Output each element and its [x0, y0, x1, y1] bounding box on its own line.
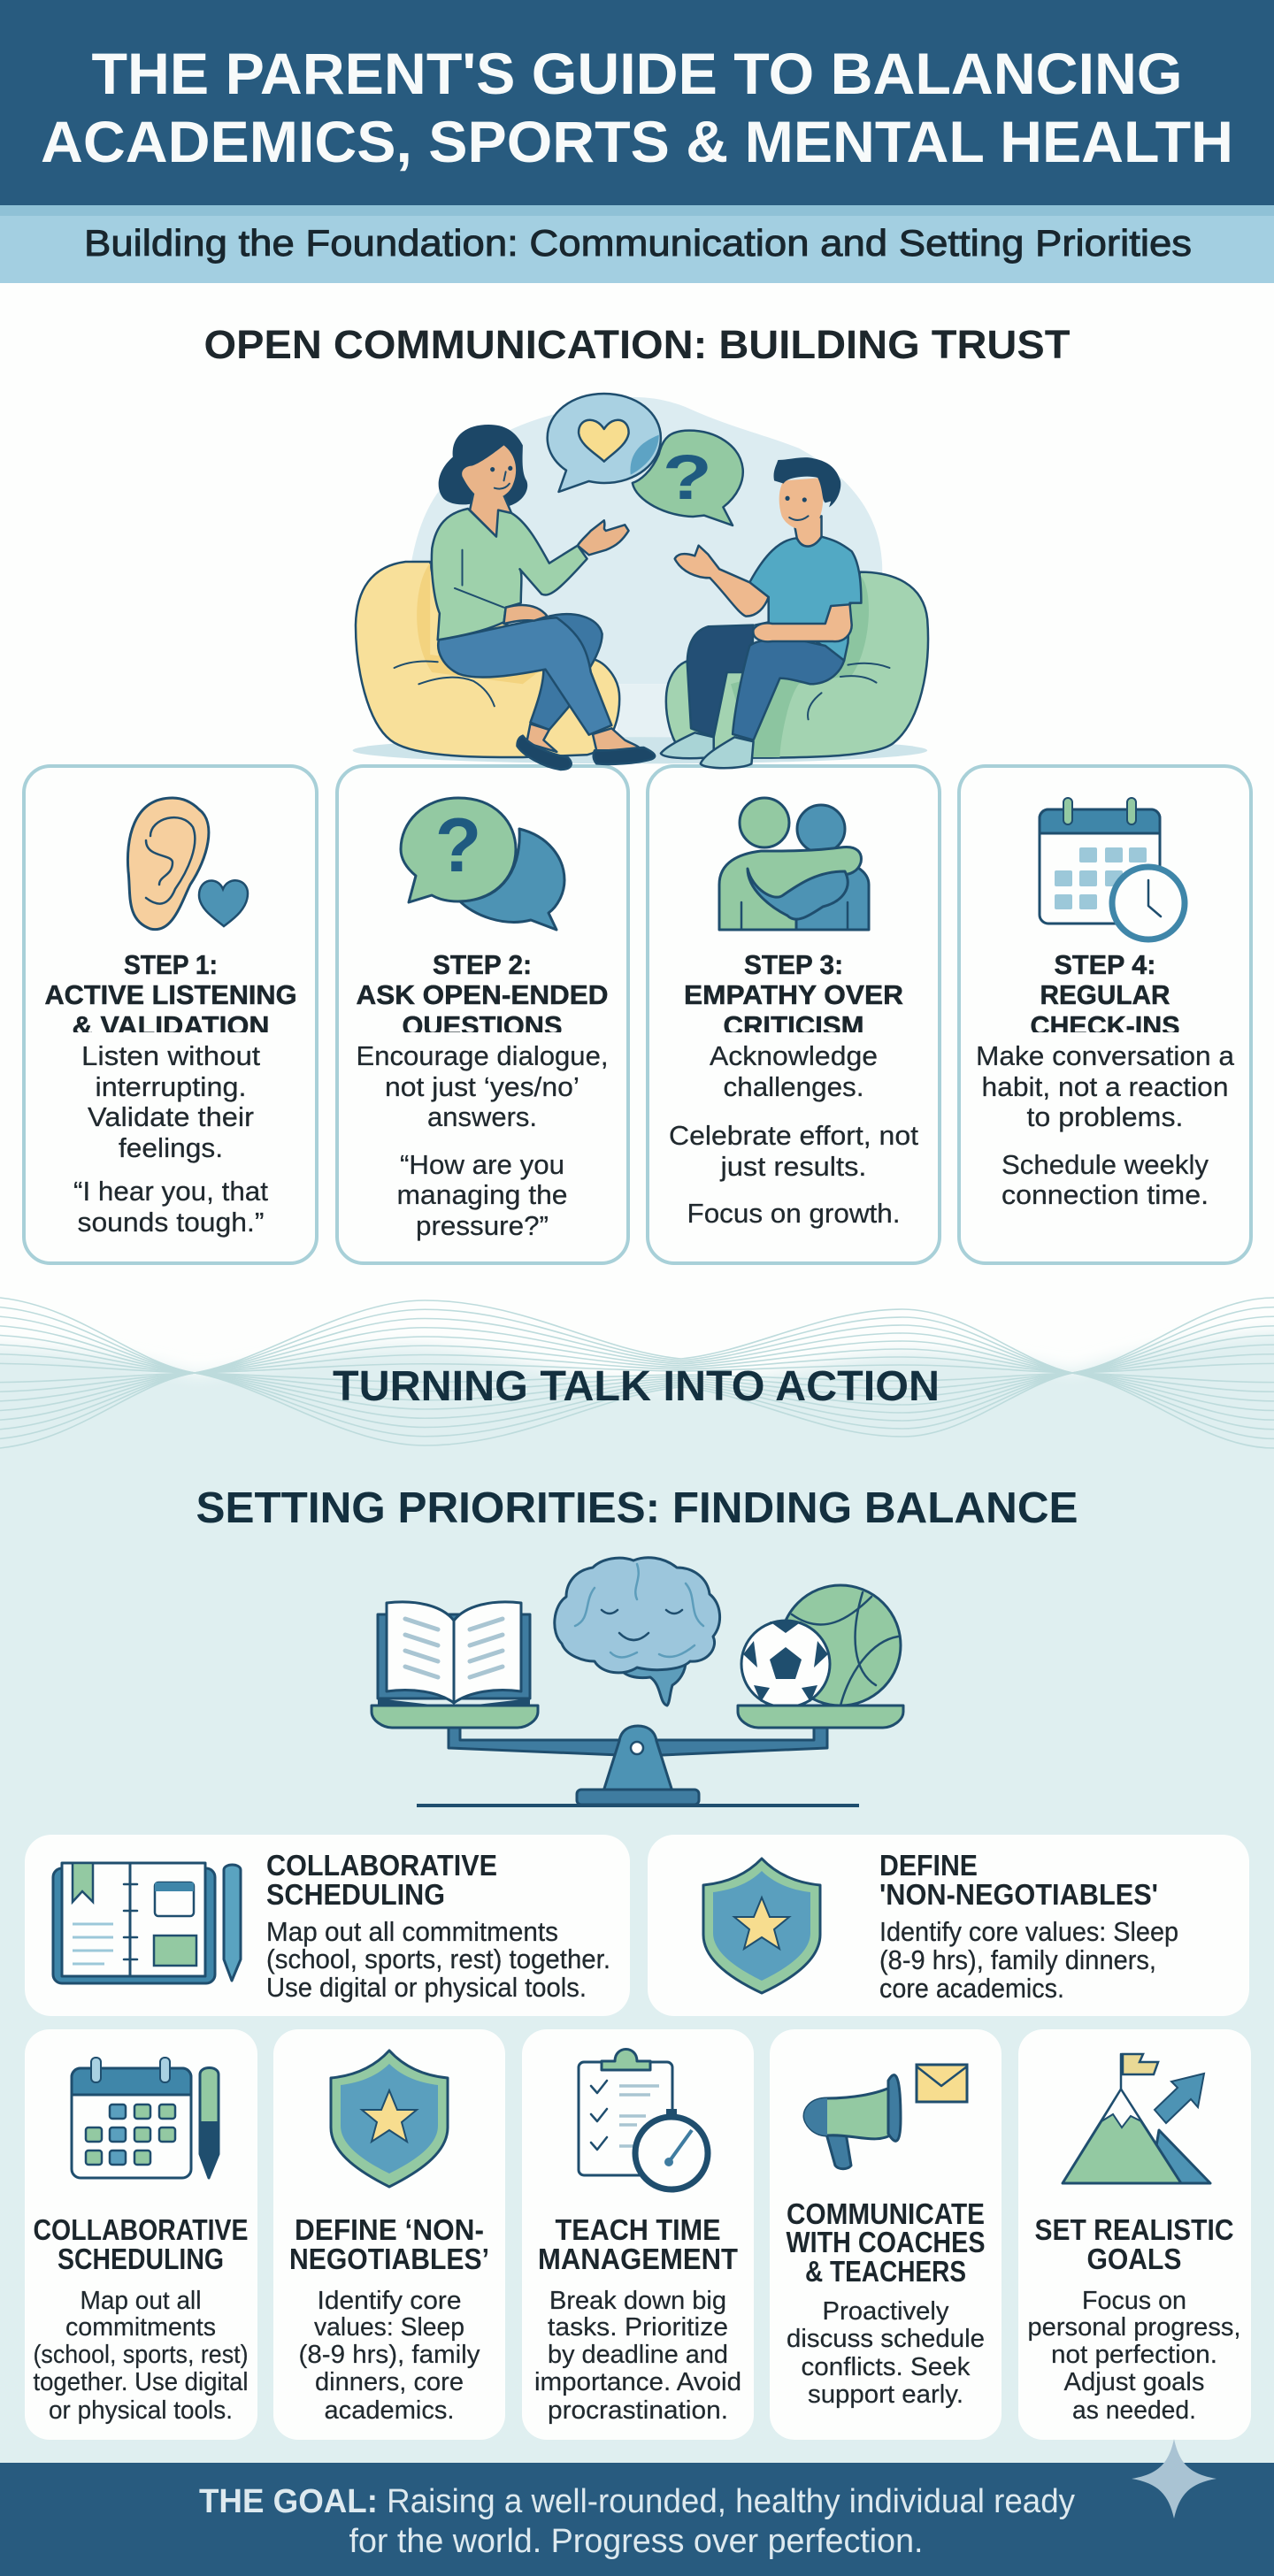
icon: planner [53, 1863, 241, 1983]
heading: TEACH TIME [556, 2213, 720, 2246]
step 2 text [356, 1040, 609, 1241]
step 1 heading [44, 955, 295, 1032]
panel: card realistic goals [1018, 2029, 1251, 2440]
step 4 heading: STEP 4: [1055, 949, 1155, 980]
text: Map out all commitments [266, 1916, 558, 1947]
scale [372, 1706, 903, 1807]
text: (school, sports, rest) [34, 2341, 248, 2369]
step 1 heading: ACTIVE LISTENING [44, 979, 297, 1010]
heading: COLLABORATIVE [34, 2213, 248, 2246]
text: personal progress, [1028, 2313, 1240, 2342]
text [787, 2297, 985, 2409]
heading: COLLABORATIVE [266, 1849, 497, 1882]
heading: & TEACHERS [805, 2255, 966, 2288]
text: Break down big [549, 2287, 726, 2315]
text [266, 1916, 610, 2003]
subtitle band: Building the Foundation: Communication and Setting Priorities [84, 222, 1192, 264]
header banner [0, 0, 1274, 205]
step 4 text: to problems. [1026, 1101, 1184, 1132]
yellow chair [356, 562, 619, 757]
text: Map out all [80, 2287, 202, 2315]
teen [661, 457, 861, 768]
heading: COMMUNICATE [787, 2197, 985, 2230]
step 4 heading [1032, 955, 1179, 1032]
step 3 text [669, 1040, 918, 1229]
panel: step 4 [959, 766, 1251, 1263]
green chair [666, 572, 928, 758]
step 3 text: Acknowledge [710, 1040, 878, 1071]
text [534, 2287, 741, 2425]
heading [1035, 2213, 1233, 2275]
panel: step 2 [337, 766, 628, 1263]
text: procrastination. [548, 2396, 728, 2425]
panel: card define non-negotiables [273, 2029, 505, 2440]
text: conflicts. Seek [802, 2353, 971, 2381]
step 4 text: Schedule weekly [1002, 1149, 1209, 1180]
panel: step 1 [24, 766, 317, 1263]
text: Focus on [1082, 2287, 1186, 2315]
icon: sparkle [1132, 2439, 1216, 2518]
heading: open communication: OPEN COMMUNICATION: BUILDING TRUST [203, 322, 1071, 367]
step 2 heading [357, 955, 607, 1032]
title: ACADEMICS, SPORTS & MENTAL HEALTH [41, 109, 1233, 174]
panel: step 3 [648, 766, 940, 1263]
icon: mountain, flag and arrow [1063, 2054, 1210, 2183]
panel: card communicate [770, 2029, 1002, 2440]
illustration: balance scale [372, 1558, 903, 1807]
icon: megaphone and envelope [804, 2065, 967, 2169]
text: (school, sports, rest) together. [266, 1944, 610, 1974]
text [299, 2287, 480, 2425]
text: values: Sleep [314, 2313, 464, 2342]
step 3 heading: STEP 3: [744, 949, 843, 980]
text: together. Use digital [34, 2368, 248, 2396]
speech bubble: question: ? [663, 442, 712, 513]
step 3 text: just results. [719, 1151, 867, 1182]
heading [289, 2213, 489, 2275]
text: tasks. Prioritize [548, 2313, 728, 2342]
panel: card time management [522, 2029, 754, 2440]
step 4 text: habit, not a reaction [982, 1071, 1228, 1102]
text: by deadline and [548, 2341, 728, 2369]
subtitle band [0, 205, 1274, 283]
step 1 text: sounds tough.” [78, 1207, 264, 1238]
icon: question speech bubbles: ? [435, 803, 481, 888]
panel: define non-negotiables wide [648, 1835, 1249, 2016]
step 1 text: Listen without [81, 1040, 260, 1071]
step 4 text [976, 1040, 1235, 1210]
title: THE PARENT'S GUIDE TO BALANCING [92, 41, 1182, 106]
heading [266, 1849, 497, 1911]
text: Proactively [823, 2297, 949, 2326]
footer banner [0, 2463, 1274, 2576]
step 4 heading: REGULAR [1040, 979, 1170, 1010]
step 2 heading: STEP 2: [433, 949, 532, 980]
heading: turning talk into action: TURNING TALK INTO ACTION [333, 1363, 940, 1410]
text: Identify core values: Sleep [879, 1916, 1178, 1947]
text: (8-9 hrs), family [299, 2341, 480, 2369]
step 1 text: feelings. [119, 1132, 223, 1163]
heading: NEGOTIABLES’ [289, 2242, 489, 2275]
text: commitments [65, 2313, 216, 2342]
heading: DEFINE [879, 1849, 978, 1882]
text [879, 1916, 1178, 2004]
heading [786, 2197, 986, 2288]
heading: setting priorities: SETTING PRIORITIES: FINDING BALANCE [196, 1484, 1078, 1532]
heading [538, 2213, 738, 2275]
step 3 text: Celebrate effort, not [669, 1120, 918, 1151]
step 1 heading: STEP 1: [124, 949, 218, 980]
icon: calendar and clock [1040, 798, 1185, 939]
icon: basketball [780, 1585, 901, 1706]
text: not perfection. [1051, 2341, 1217, 2369]
text: discuss schedule [787, 2325, 985, 2353]
speech bubble: heart [548, 394, 661, 492]
text: as needed. [1072, 2396, 1196, 2425]
icon: two people hugging [719, 798, 869, 930]
icon: shield [703, 1859, 820, 1993]
text: academics. [324, 2396, 455, 2425]
heading: GOALS [1086, 2242, 1182, 2275]
step cards [24, 766, 1251, 1263]
text: Adjust goals [1063, 2368, 1205, 2396]
text: importance. Avoid [534, 2368, 741, 2396]
woman [432, 425, 655, 770]
text: dinners, core [315, 2368, 464, 2396]
icon: calm brain [555, 1558, 720, 1706]
step 3 heading: EMPATHY OVER [684, 979, 903, 1010]
step 2 text: answers. [427, 1101, 537, 1132]
step 2 text: Encourage dialogue, [356, 1040, 609, 1071]
step 2 heading: ASK OPEN-ENDED [356, 979, 609, 1010]
icon: shield [331, 2051, 448, 2187]
text [1028, 2287, 1240, 2425]
step 1 text [73, 1040, 268, 1238]
step 2 text: not just ‘yes/no’ [385, 1071, 579, 1102]
step 2 text: managing the [396, 1179, 568, 1210]
step 4 heading: CHECK-INS [1030, 1010, 1180, 1041]
step 3 text: challenges. [724, 1071, 863, 1102]
heading: 'NON-NEGOTIABLES' [879, 1878, 1158, 1911]
footer text: for the world. Progress over perfection. [349, 2523, 924, 2560]
step 4 text: connection time. [1002, 1179, 1209, 1210]
text: Use digital or physical tools. [266, 1972, 587, 2003]
step 4 text: Make conversation a [976, 1040, 1235, 1071]
heading: SCHEDULING [266, 1878, 445, 1911]
icon: book [378, 1602, 530, 1707]
footer text [199, 2483, 1075, 2560]
text: or physical tools. [49, 2396, 233, 2425]
text [34, 2287, 248, 2425]
step 3 heading: CRITICISM [724, 1010, 863, 1041]
text: support early. [808, 2380, 963, 2409]
heading: SCHEDULING [58, 2242, 224, 2275]
icon: clipboard and stopwatch [579, 2049, 708, 2189]
icon: calendar and pen [72, 2058, 219, 2178]
step 1 text: interrupting. [96, 1071, 246, 1102]
text: core academics. [879, 1973, 1064, 2004]
step 1 text: Validate their [88, 1101, 254, 1132]
step 1 heading: & VALIDATION [73, 1010, 269, 1041]
footer text: THE GOAL: Raising a well-rounded, healthy individual ready [199, 2483, 1075, 2520]
heading [879, 1849, 1158, 1911]
text: Identify core [317, 2287, 462, 2315]
text: (8-9 hrs), family dinners, [879, 1944, 1156, 1975]
panel: collaborative scheduling wide [25, 1835, 630, 2016]
step 3 text: Focus on growth. [687, 1198, 901, 1229]
step 3 heading [685, 955, 903, 1032]
icon: soccer ball [741, 1621, 830, 1707]
icon: question speech bubbles [401, 798, 564, 930]
heading: MANAGEMENT [538, 2242, 738, 2275]
step 1 text: “I hear you, that [73, 1176, 268, 1207]
heading: SET REALISTIC [1035, 2213, 1233, 2246]
step 2 heading: QUESTIONS [402, 1010, 563, 1041]
step 2 text: “How are you [400, 1149, 564, 1180]
speech bubble: question [633, 431, 743, 525]
illustration: parent and teen talking [353, 394, 928, 770]
icon: ear and heart [127, 798, 248, 930]
heading: DEFINE ‘NON- [295, 2213, 484, 2246]
panel: card collaborative scheduling [25, 2029, 257, 2440]
heading [34, 2213, 248, 2275]
title [41, 41, 1233, 174]
step 2 text: pressure?” [416, 1210, 549, 1241]
heading: WITH COACHES [786, 2226, 986, 2258]
